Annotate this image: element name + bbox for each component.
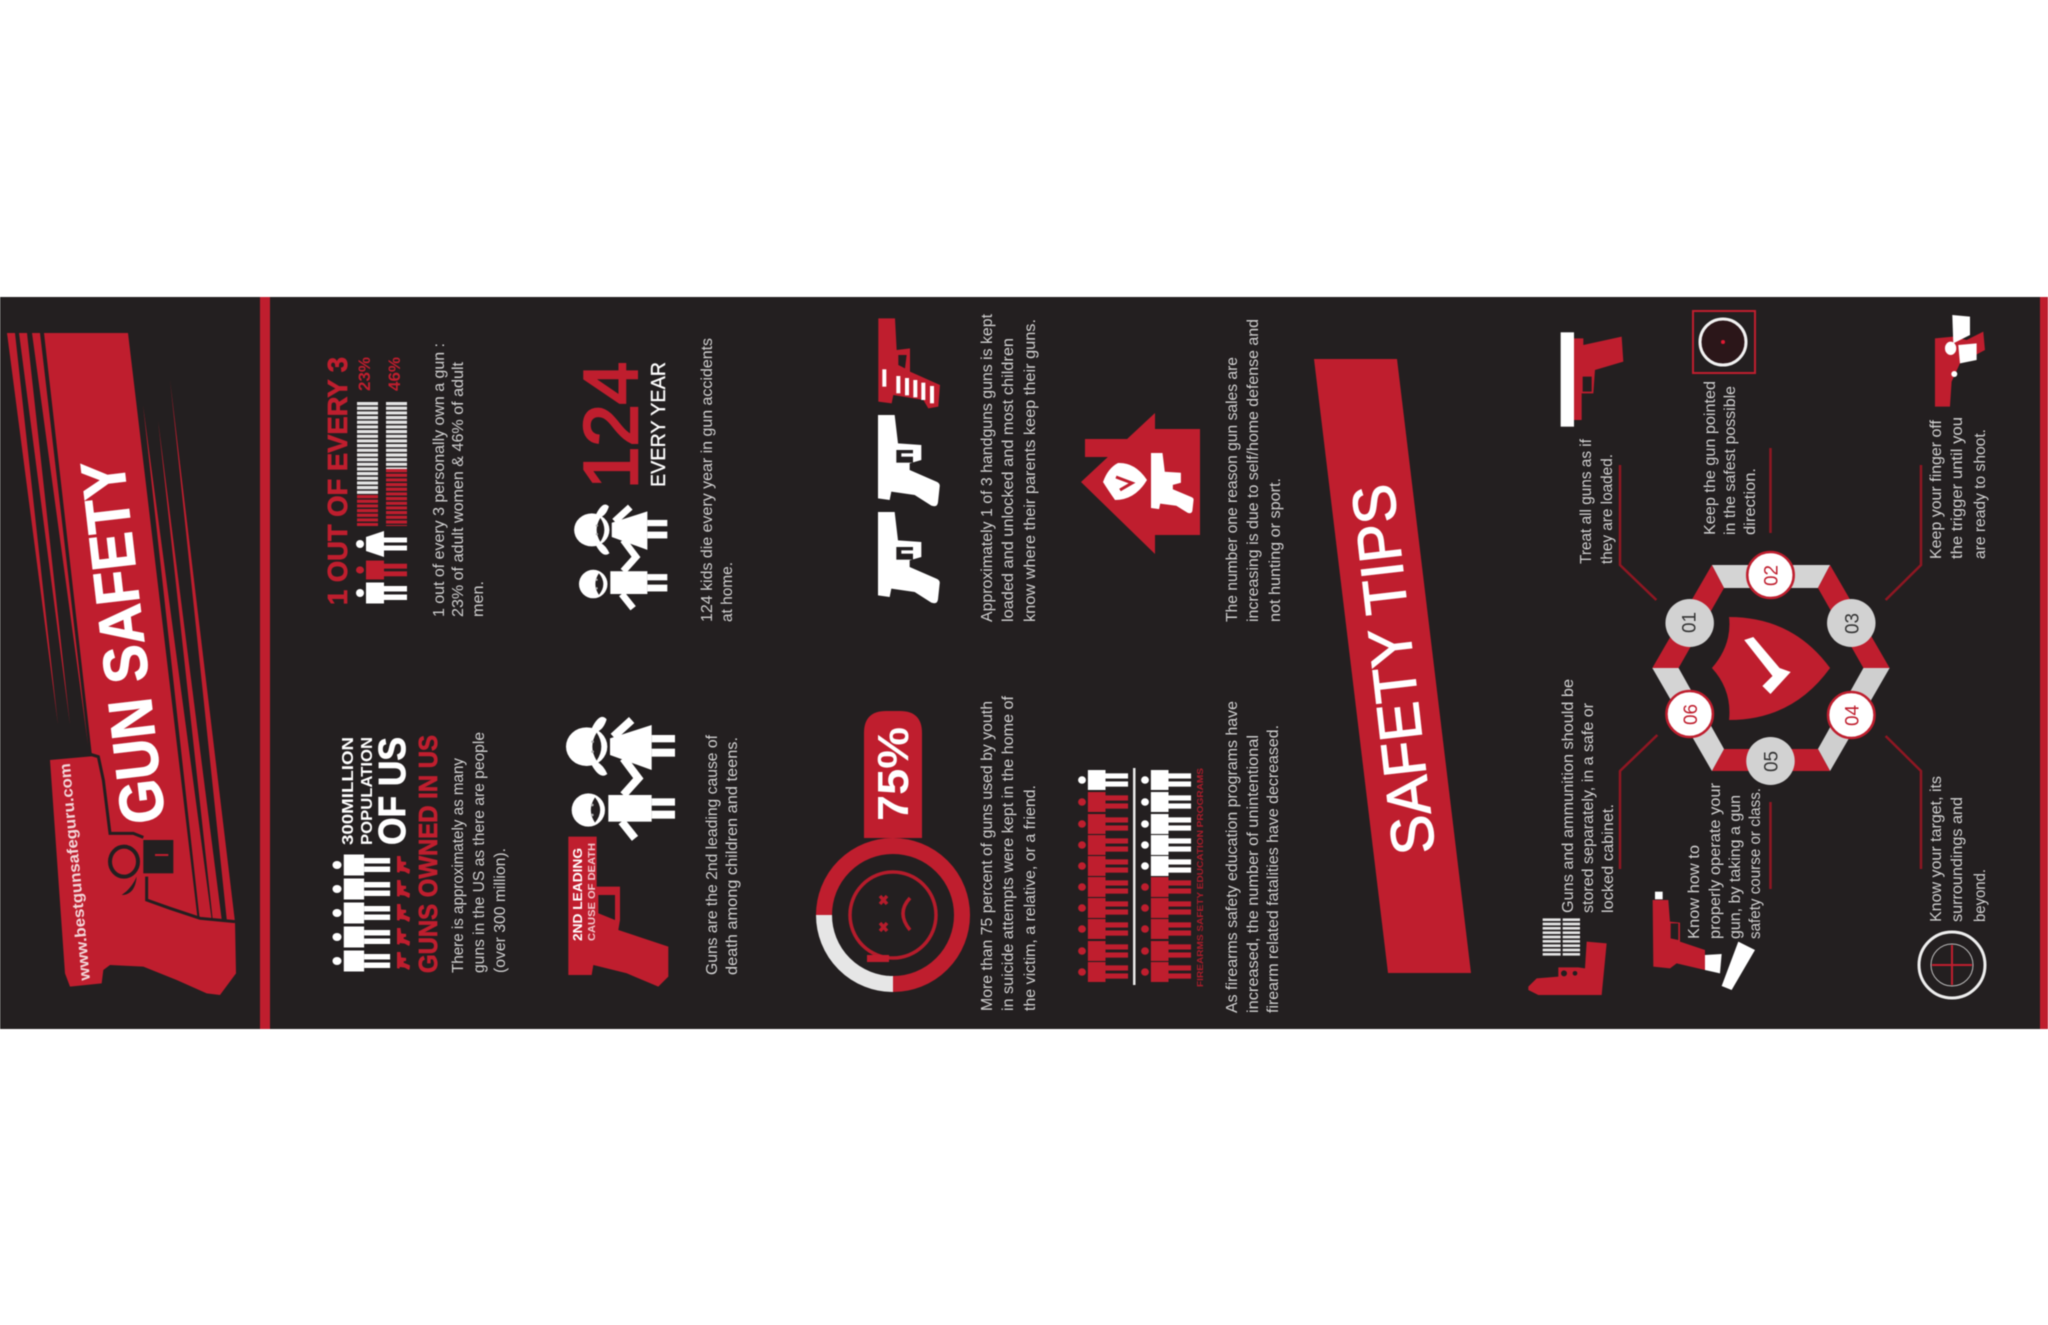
- text: properly operate your: [1707, 782, 1724, 939]
- icon: scope crosshair: [1919, 932, 1985, 998]
- body text: [979, 313, 1039, 622]
- body text: guns in the US as there are people: [471, 732, 488, 973]
- icon: target sight: [1693, 311, 1755, 373]
- tip 06: [1528, 679, 1617, 995]
- step 04: [1828, 692, 1875, 738]
- stat: one of three handguns: [878, 313, 1039, 622]
- step 01: 01: [1680, 612, 1701, 633]
- headline: of us: OF US: [372, 737, 414, 845]
- people icons: [356, 531, 407, 604]
- icon: ammunition and gun: [1528, 918, 1607, 995]
- tip 01: [1561, 332, 1623, 564]
- hexagon ring segments: [1652, 565, 1890, 771]
- body text: The number one reason gun sales are: [1224, 357, 1241, 622]
- body text: death among children and teens.: [724, 737, 741, 975]
- text: Keep the gun pointed: [1702, 381, 1719, 535]
- body text: increased, the number of unintentional: [1245, 735, 1262, 1013]
- body text: at home.: [719, 562, 736, 622]
- step 02: [1747, 552, 1794, 598]
- tip 03: [1928, 315, 1989, 559]
- text: Keep your finger off: [1928, 419, 1945, 559]
- step 02: 02: [1761, 565, 1783, 586]
- heading text: SAFETY TIPS: [1339, 481, 1448, 858]
- icon: two children: [574, 504, 667, 608]
- text: in the safest possible: [1722, 386, 1739, 535]
- center shield: [1712, 617, 1830, 720]
- body text: [699, 338, 736, 622]
- headline: guns owned in us: GUNS OWNED IN US: [413, 735, 443, 973]
- body text: men.: [470, 581, 487, 617]
- text: Know your target, its: [1928, 776, 1945, 922]
- donut chart: [824, 846, 962, 984]
- icon: white gun: [1151, 453, 1194, 513]
- body text: [979, 695, 1039, 1011]
- body text: There is approximately as many: [450, 758, 467, 973]
- body text: increasing is due to self/home defense and: [1245, 319, 1262, 622]
- body text: firearm related fatalities have decreased.: [1265, 725, 1282, 1013]
- icon: red gun with bullets: [878, 318, 940, 408]
- five small guns: [397, 856, 410, 970]
- text: [1702, 381, 1759, 535]
- text: gun, by taking a gun: [1727, 795, 1744, 939]
- title: gun safety: GUN SAFETY: [68, 457, 179, 827]
- text: direction.: [1742, 468, 1759, 535]
- text: safety course or class.: [1747, 788, 1764, 939]
- header: gun safety banner: [7, 333, 236, 995]
- body text: 124 kids die every year in gun accidents: [699, 338, 716, 622]
- number 124: 124: [569, 362, 654, 489]
- icon: white gun: [878, 512, 940, 603]
- dark background band: [0, 297, 2048, 1029]
- text: they are loaded.: [1599, 454, 1616, 564]
- icon: red gun: [568, 837, 668, 987]
- right red edge bar: [2040, 297, 2048, 1029]
- body text: 23% of adult women & 46% of adult: [450, 361, 467, 617]
- stat: 75 percent: [824, 695, 1039, 1011]
- icon: house: [1081, 413, 1200, 554]
- icon: two children: [566, 717, 675, 838]
- headline: 1 OUT OF EVERY 3: [322, 357, 353, 605]
- body text: [704, 734, 741, 975]
- body text: Approximately 1 of 3 handguns guns is kept: [979, 313, 996, 622]
- step 05: [1746, 737, 1795, 785]
- text: locked cabinet.: [1600, 804, 1617, 913]
- stat: 300 million guns: [332, 732, 509, 973]
- body text: not hunting or sport.: [1267, 478, 1284, 622]
- connector lines: [1620, 448, 1921, 889]
- label 23%: 23%: [355, 357, 374, 391]
- body text: (over 300 million).: [492, 848, 509, 973]
- headline: 300 million: 300MILLION: [340, 737, 357, 845]
- safety tips hexagon diagram: [1620, 448, 1921, 889]
- text: surroundings and: [1949, 797, 1966, 922]
- left red divider bar: [260, 297, 270, 1029]
- pill label: 75%: [869, 727, 918, 821]
- step 06: 06: [1681, 704, 1702, 725]
- text: [1928, 776, 1989, 922]
- tip 05: [1653, 782, 1764, 990]
- people rows: [1078, 768, 1191, 985]
- text: Guns and ammunition should be: [1560, 679, 1577, 913]
- five people icons: [332, 854, 390, 972]
- text: Know how to: [1686, 845, 1703, 939]
- pill: [864, 711, 922, 838]
- body text: [1224, 319, 1284, 622]
- label 46%: 46%: [385, 357, 404, 391]
- banner speed stripes: [7, 333, 235, 922]
- text: [1578, 438, 1616, 564]
- body text: [431, 343, 487, 617]
- body text: As firearms safety education programs have: [1224, 701, 1241, 1013]
- step 01: [1665, 599, 1714, 647]
- step 06: [1666, 691, 1713, 737]
- tip 02: [1693, 311, 1759, 535]
- body text: know where their parents keep their guns.: [1022, 319, 1039, 622]
- stat: second leading cause: [566, 717, 741, 987]
- body text: [450, 732, 509, 973]
- step 03: [1827, 599, 1876, 647]
- icon: gun with white slide: [1561, 332, 1623, 427]
- label: 2nd leading: 2ND LEADING: [570, 848, 585, 941]
- body text: in suicide attempts were kept in the home of: [1000, 695, 1017, 1011]
- stat: 1 out of every 3: [322, 343, 487, 617]
- stat: home defense: [1081, 319, 1284, 622]
- icon: sad face: [850, 872, 936, 962]
- step 03: 03: [1842, 613, 1863, 634]
- body text: loaded and unlocked and most children: [1000, 338, 1017, 622]
- body text: [1224, 701, 1282, 1013]
- text: are ready to shoot.: [1972, 429, 1989, 559]
- body text: More than 75 percent of guns used by youth: [979, 701, 996, 1011]
- text: beyond.: [1972, 869, 1989, 922]
- tip 04: [1919, 776, 1989, 998]
- stat: firearm safety education: [1078, 701, 1282, 1013]
- text: [1928, 417, 1989, 559]
- icon: gun and hand: [1935, 315, 1985, 407]
- every year label: EVERY YEAR: [648, 362, 670, 487]
- heading: safety tips banner: [1314, 359, 1471, 973]
- body text: 1 out of every 3 personally own a gun :: [431, 343, 448, 617]
- stat: 124 every year: [569, 338, 736, 622]
- banner body and gun silhouette: [44, 333, 236, 995]
- text: Treat all guns as if: [1578, 438, 1595, 564]
- step 05: 05: [1761, 751, 1783, 772]
- icon: shield: [1103, 463, 1147, 500]
- icon: white gun: [878, 415, 940, 506]
- body text: the victim, a relative, or a friend.: [1022, 785, 1039, 1011]
- step 04: 04: [1842, 705, 1863, 726]
- text: the trigger until you: [1949, 417, 1966, 559]
- icon: gun and magazine: [1653, 892, 1755, 990]
- text: [1686, 782, 1764, 939]
- chart caption: FIREARMS SAFETY EDUCATION PROGRAMS: [1196, 767, 1205, 987]
- pictogram bars: [368, 402, 396, 526]
- website url: www.bestgunsafeguru.com: [57, 763, 94, 982]
- check mark: [1744, 637, 1791, 694]
- text: [1560, 679, 1617, 913]
- headline: population: POPULATION: [359, 737, 376, 845]
- text: stored separately, in a safe or: [1580, 702, 1597, 913]
- body text: Guns are the 2nd leading cause of: [704, 734, 721, 975]
- label: cause of death: CAUSE OF DEATH: [587, 843, 598, 941]
